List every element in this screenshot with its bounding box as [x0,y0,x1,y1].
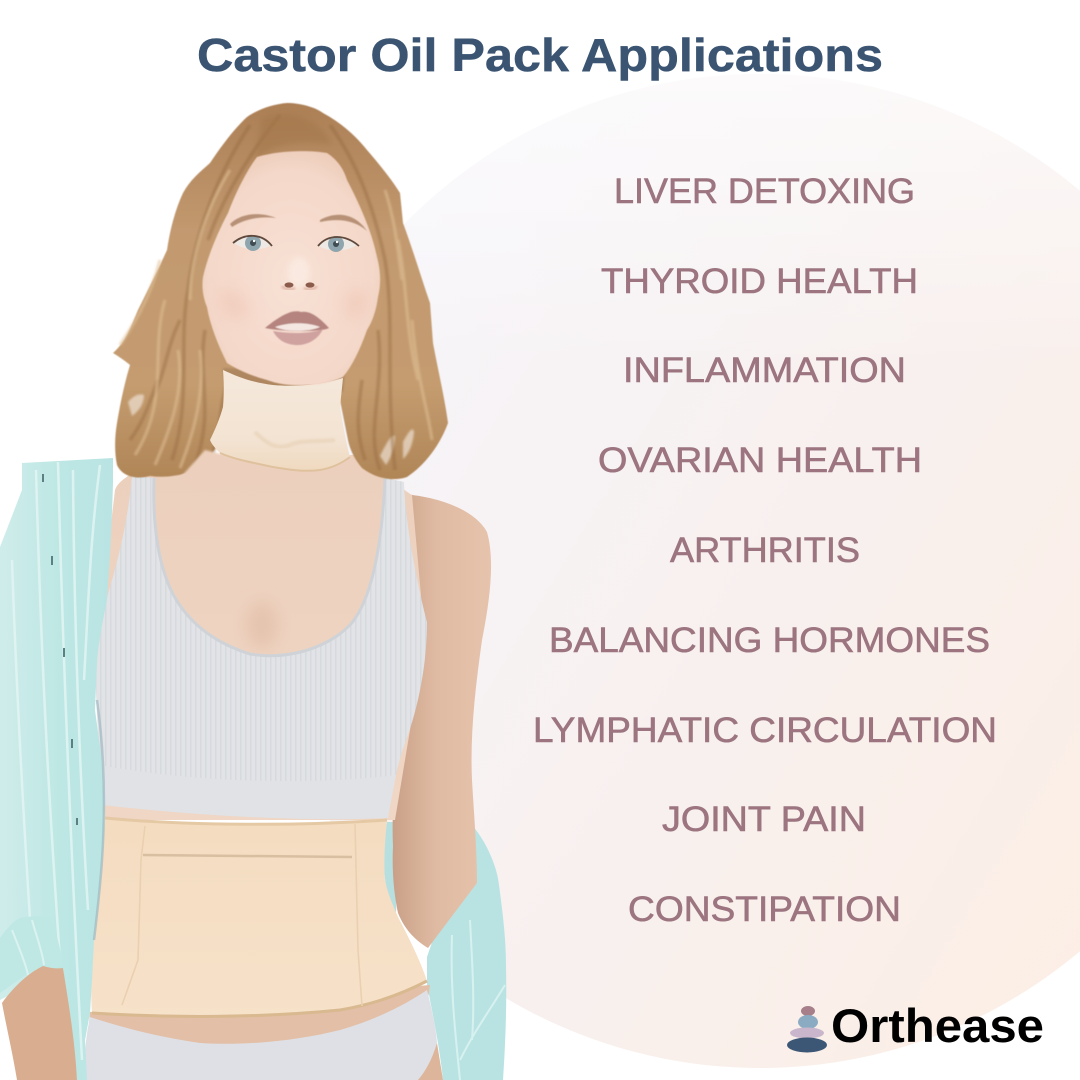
shirt stripes [12,462,100,1060]
right arm and shoulder [393,494,491,948]
shirt behind waist [384,822,396,915]
shirt body [0,458,113,1080]
nose [282,257,317,289]
list of applications [533,172,997,929]
left eye [233,235,272,251]
chest shading [246,601,278,649]
item: balancing hormones: BALANCING HORMONES [549,621,990,660]
right shirt sleeve [427,825,506,1080]
hair crown shadow [255,114,332,160]
left forearm [2,966,77,1080]
background gradient circle [262,73,1080,1069]
cuff fold lines [12,920,44,975]
cheek blush [220,289,368,320]
item: arthritis: ARTHRITIS [670,531,860,570]
item: thyroid health: THYROID HEALTH [601,262,918,301]
item: ovarian health: OVARIAN HEALTH [598,441,922,480]
title: Castor Oil Pack Applications [197,29,883,81]
hair shadow strands [130,115,395,470]
stacked stones icon [787,1006,827,1052]
bra neckline trim [154,478,385,656]
right eye [318,236,359,252]
wrap bottom edge [92,981,427,1016]
rolled cuff [0,916,63,993]
item: constipation: CONSTIPATION [628,890,901,929]
zipper [143,855,352,857]
neck shadow [223,368,345,392]
hair highlight strands [120,170,432,468]
right hip skin [415,1043,443,1080]
wrap fold [255,432,335,447]
wrap body [91,818,427,1016]
pocket seams [122,824,362,1006]
wrap lower edge [220,453,350,471]
brand logo [787,999,1044,1052]
face [202,151,380,385]
face shape [202,151,380,385]
hair back [113,103,448,479]
bra top [96,476,427,819]
illustration: woman wearing castor oil packs [0,103,506,1080]
left shirt panel [0,458,113,1080]
bra hem band [100,765,396,819]
torso skin [96,455,425,820]
left eyebrow [230,214,276,227]
item: liver detoxing: LIVER DETOXING [614,172,915,211]
neck wrap pack [210,370,350,471]
belly wrap pack [91,818,427,1016]
shirt inner shadow [94,700,104,940]
wrap top edge [105,818,387,824]
skin below belt [88,985,430,1050]
lips [265,311,329,345]
shirt buttons [43,474,77,825]
item: joint pain: JOINT PAIN [662,800,866,839]
right eyebrow [320,215,367,231]
item: inflammation: INFLAMMATION [623,351,906,390]
brand name: Orthease [831,999,1044,1052]
hair gaps showing background [128,394,414,465]
shoulder skin over hair tips [180,450,300,490]
underwear [85,990,437,1080]
item: lymphatic circulation: LYMPHATIC CIRCULATION [533,711,997,750]
